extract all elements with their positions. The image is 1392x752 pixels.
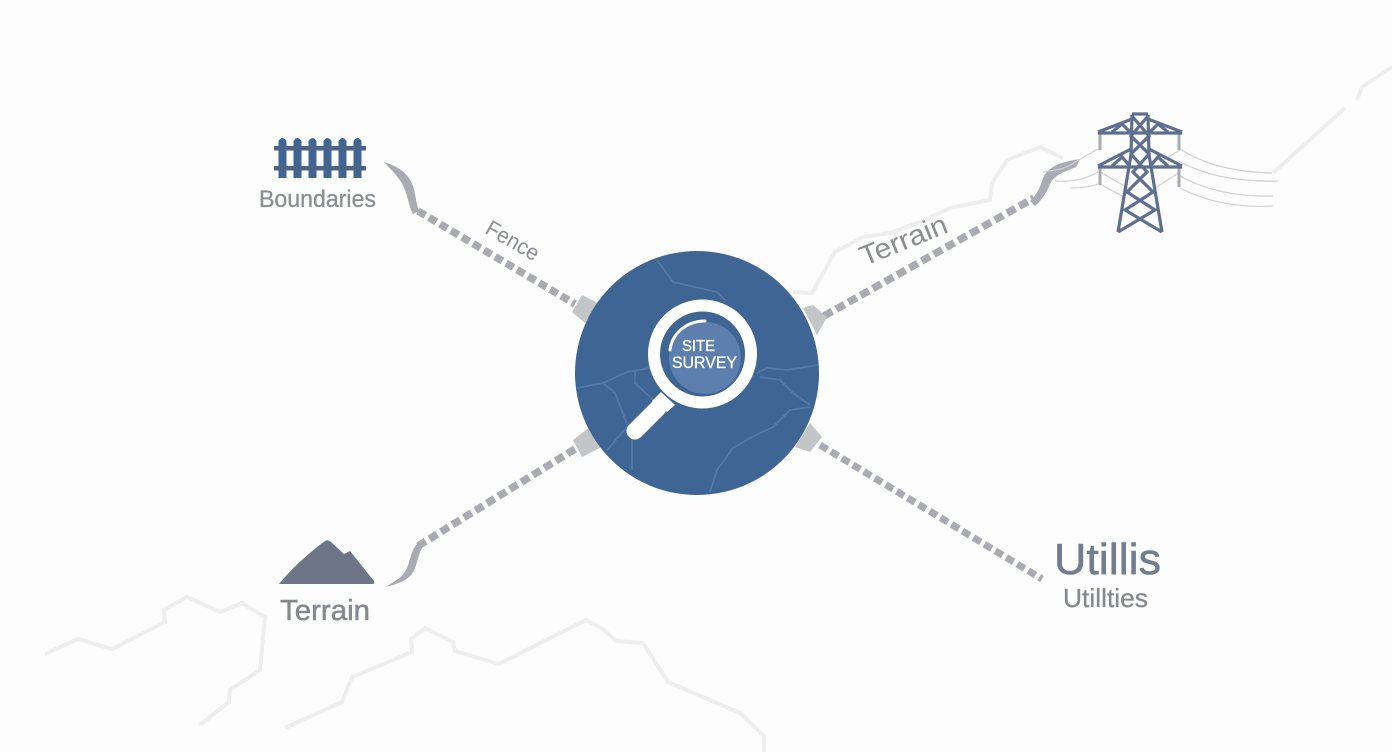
lens inner (669, 322, 741, 394)
terrain contour: far right (1273, 67, 1392, 173)
label: Boundaries: Boundaries (259, 186, 376, 213)
connector: lower right (795, 423, 822, 452)
squiggle: upper right (1030, 159, 1080, 206)
lens label: SURVEY: SURVEY (672, 354, 737, 372)
central circle (575, 251, 819, 495)
handle neck (652, 392, 675, 412)
connector: lower left (573, 427, 602, 457)
insulators (1100, 134, 1179, 187)
dashed path: lower left (418, 449, 575, 546)
dashed path: terrain (824, 198, 1034, 316)
icon: transmission tower (1043, 114, 1278, 232)
dashed path: utilities (820, 445, 1042, 579)
squiggle: lower left (385, 543, 422, 587)
connector: top left (572, 295, 598, 323)
label: Fence: Fence (481, 215, 544, 266)
icon: mountain (279, 540, 374, 584)
magnifying glass icon (635, 306, 751, 431)
lens label: SITE: SITE (682, 338, 715, 355)
icon: fence (274, 138, 366, 178)
terrain contour: bottom centre (285, 620, 764, 752)
lattice (1098, 114, 1182, 232)
lens (654, 306, 751, 402)
lens glint (670, 321, 705, 350)
dashed path: fence (418, 211, 575, 304)
handle grip (635, 408, 658, 431)
power lines (1043, 149, 1278, 206)
squiggle: fence (384, 162, 419, 214)
label: Utillis: Utillis (1054, 535, 1161, 584)
label: Terrain on path: Terrain (855, 209, 952, 272)
terrain contour: upper right (793, 147, 1063, 293)
map lines inside circle (577, 260, 818, 492)
label: Terrain: Terrain (280, 595, 370, 627)
terrain contour: bottom left (45, 597, 265, 725)
connector: top right (803, 305, 827, 335)
label: Utilities: Utillties (1063, 583, 1148, 613)
